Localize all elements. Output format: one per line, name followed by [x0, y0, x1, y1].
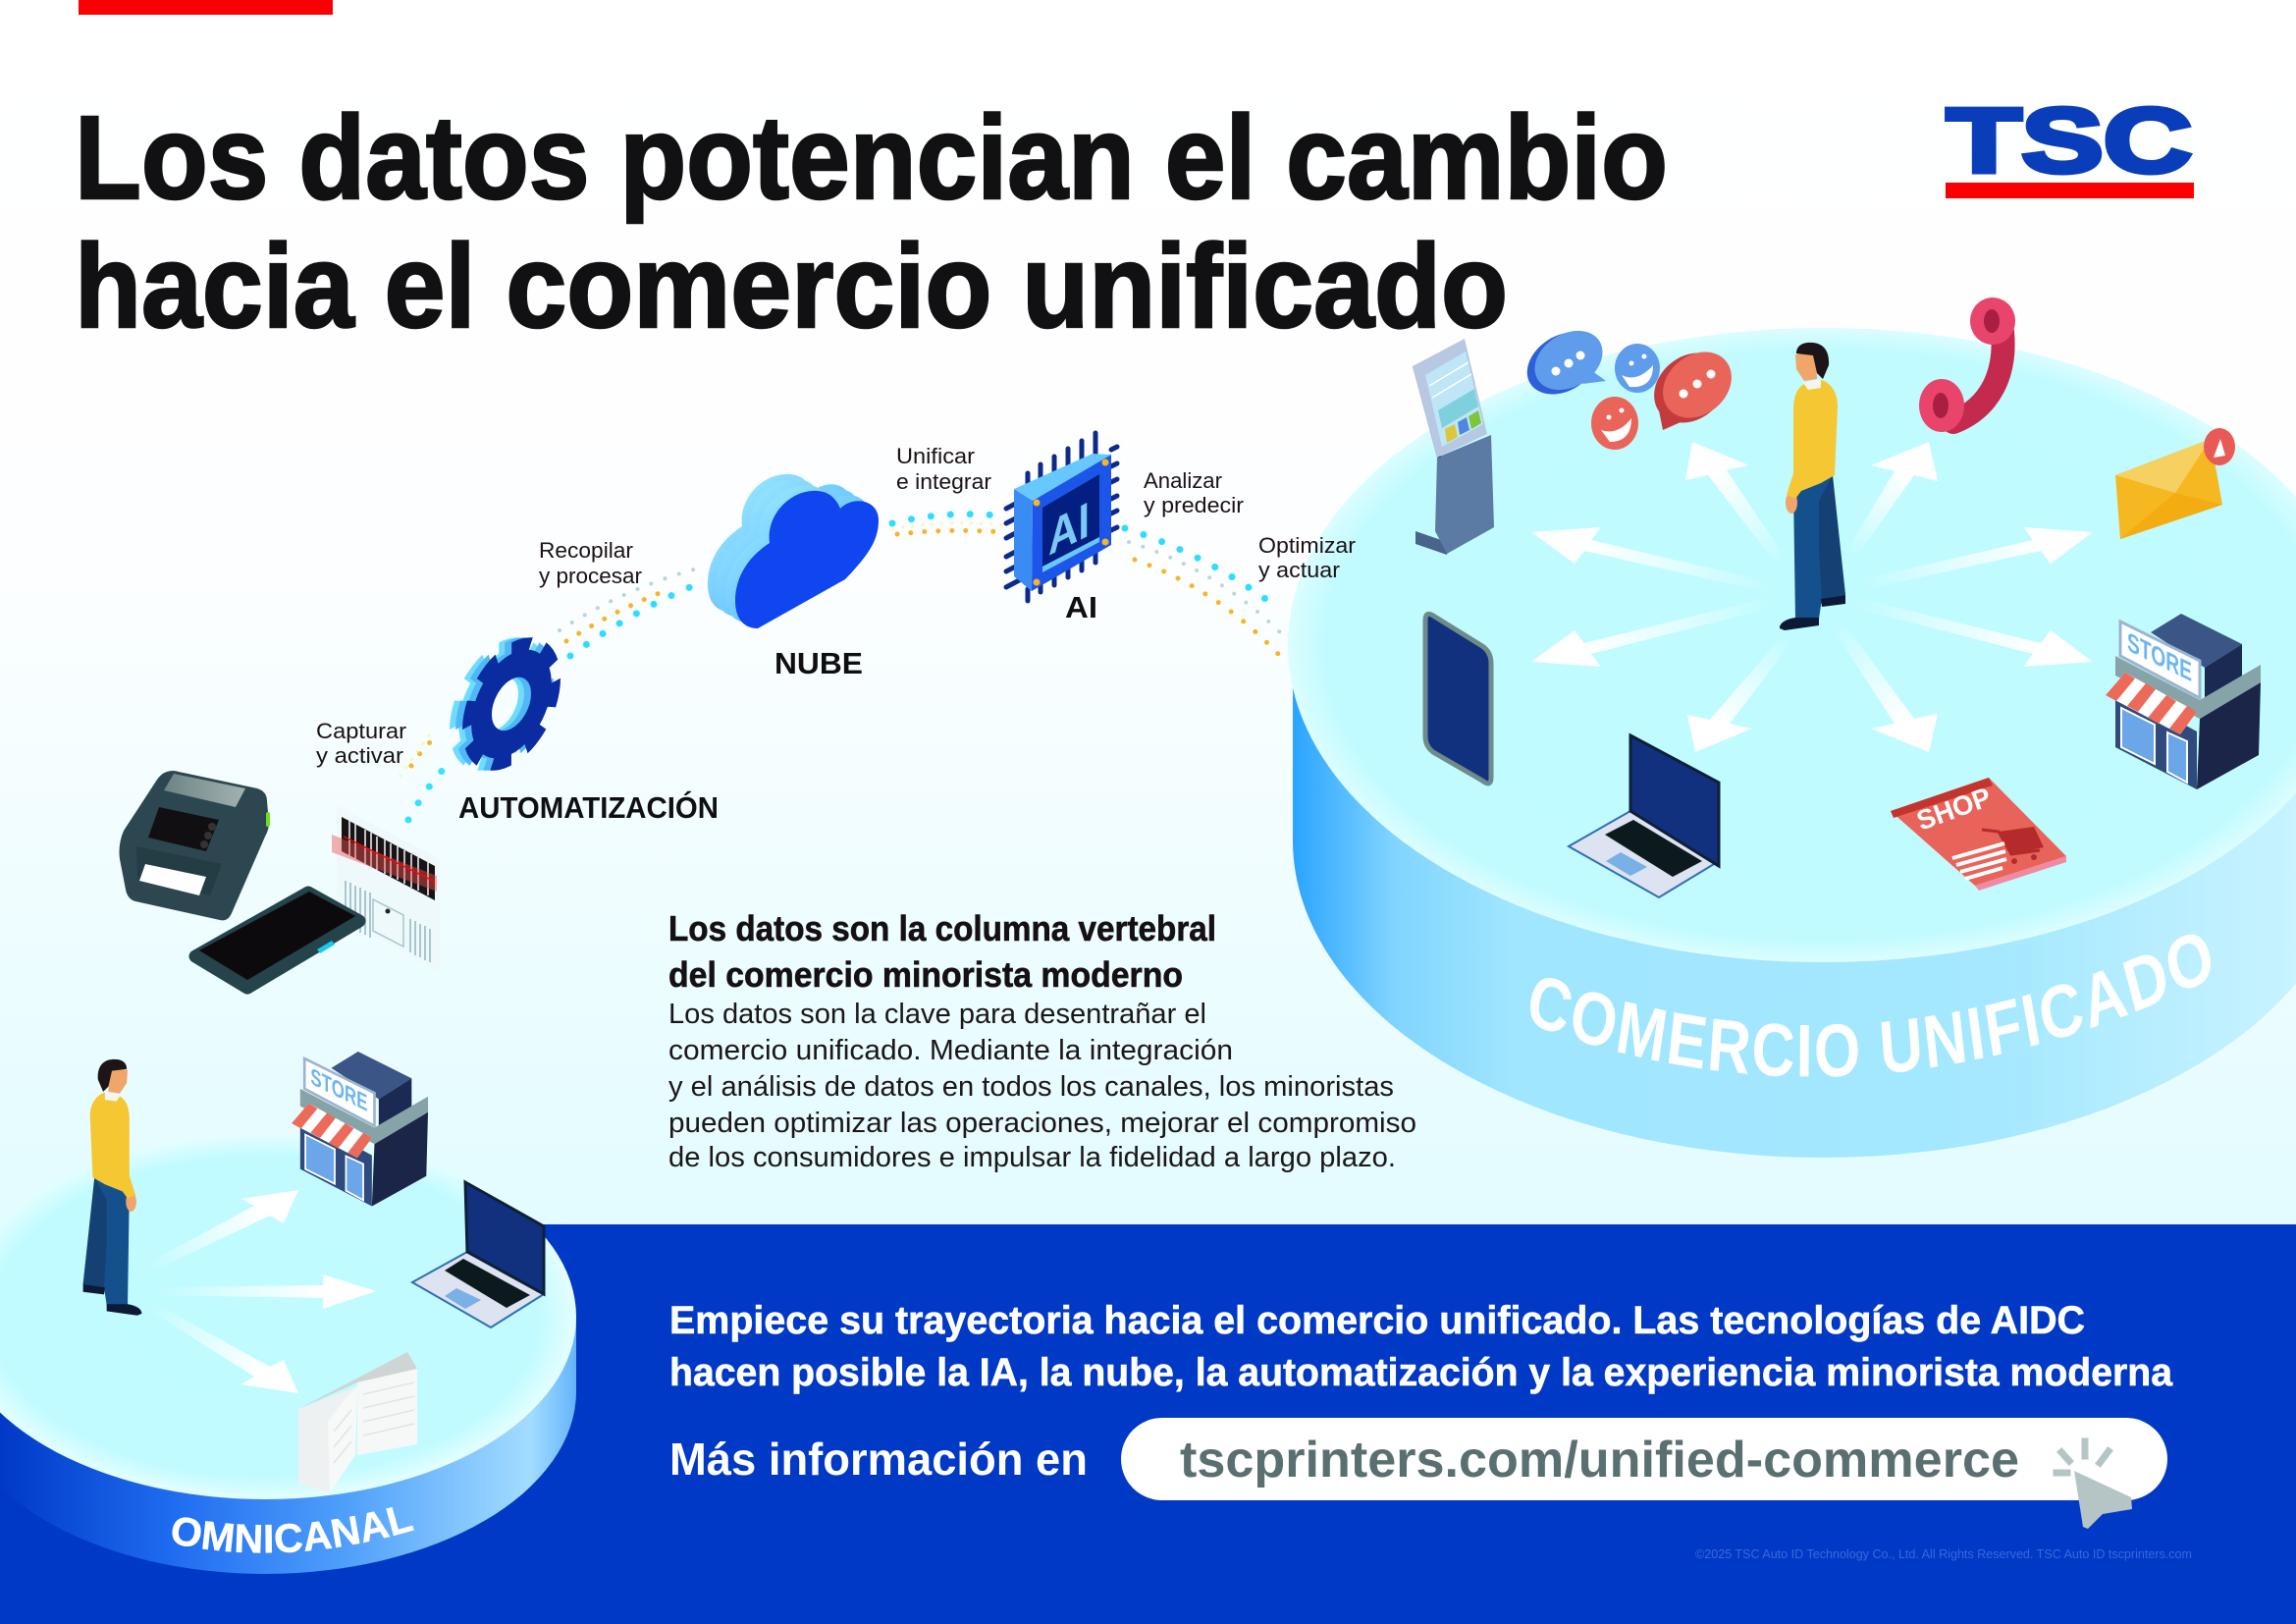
step label: recopilar y procesar: [539, 538, 642, 588]
logo: TSC: TSC: [1947, 89, 2192, 191]
icon: shopper, unified: [1780, 343, 1845, 630]
step label: analizar y predecir: y predecir: [1144, 493, 1244, 517]
step label: unificar e integrar: [896, 444, 991, 494]
icon: smartphone: [1425, 614, 1491, 784]
copyright: ©2025 TSC Auto ID Technology Co., Ltd. All Rights Reserved. TSC Auto ID tscprinters.com: [1695, 1546, 2192, 1561]
icon: laptop: [1569, 735, 1719, 897]
label: nube: NUBE: [774, 646, 863, 680]
step label: optimizar y actuar: y actuar: [1258, 558, 1340, 582]
icon: automation gear: [454, 625, 556, 783]
body copy: Los datos son la clave para desentrañar el: [668, 999, 1206, 1030]
CTA headline: Empiece su trayectoria hacia el comercio unificado. Las tecnologías de AIDC: [669, 1299, 2085, 1342]
body copy: [668, 999, 1416, 1173]
title: [75, 90, 1668, 352]
icon: store, unified: [2106, 614, 2261, 789]
CTA headline: [669, 1299, 2173, 1394]
icon: store, unified: STORE: [2127, 626, 2192, 688]
icon: AI chip: AI: [1048, 492, 1090, 567]
icon: click cursor: [2056, 1441, 2132, 1529]
heading: Los datos son la columna vertebral: [668, 908, 1216, 948]
icon: mobile computer: [195, 892, 359, 988]
heading: [668, 908, 1216, 995]
icon: kiosk: [1413, 339, 1494, 555]
platform: comercio unificado: [1288, 328, 2296, 1158]
call to action: [669, 1299, 2173, 1529]
arrows radiating from shopper: [1531, 442, 2093, 752]
blue footer band: [0, 1224, 2296, 1624]
icon: laptop, omnichannel: [412, 1182, 544, 1327]
background: [0, 0, 2296, 1227]
platform top: [0, 1134, 576, 1499]
red top bar: [79, 0, 333, 15]
step label: unificar e integrar: Unificar: [896, 444, 975, 468]
heading: del comercio minorista moderno: [668, 954, 1183, 995]
URL pill: tscprinters.com/unified-commerce: [1180, 1432, 2019, 1489]
step label: capturar y activar: Capturar: [316, 719, 406, 743]
dots: AI to platform: [1125, 528, 1281, 655]
URL pill: [1121, 1418, 2167, 1500]
logo: TSC: [1946, 89, 2194, 198]
icon: chat bubbles: [1516, 318, 1744, 450]
step label: optimizar y actuar: [1258, 533, 1356, 582]
label: AI: AI: [1065, 590, 1097, 624]
step label: capturar y activar: y activar: [316, 743, 403, 768]
icon: shopper, omnichannel: [83, 1059, 141, 1316]
platform: omnicanal: [0, 1139, 576, 1574]
platform label: COMERCIO UNIFICADO: [1530, 935, 2211, 1077]
platform side: [1293, 645, 2296, 1158]
icon: envelope with notification: [2115, 428, 2235, 539]
data flow: dotted paths: [400, 514, 1281, 820]
arrows from omnichannel shopper: [143, 1190, 376, 1393]
step label: unificar e integrar: e integrar: [896, 469, 991, 494]
icon: telephone handset: [1919, 298, 2015, 432]
CTA headline: hacen posible la IA, la nube, la automatización y la experiencia minorista moderna: [669, 1351, 2173, 1394]
dots: cloud to AI: [892, 514, 1004, 534]
body copy: de los consumidores e impulsar la fidelidad a largo plazo.: [668, 1142, 1396, 1173]
body copy: pueden optimizar las operaciones, mejorar el compromiso: [668, 1108, 1416, 1139]
step label: analizar y predecir: Analizar: [1144, 468, 1222, 493]
step label: recopilar y procesar: Recopilar: [539, 538, 633, 563]
icon: AI chip: [1006, 433, 1117, 601]
icon: cloud: [708, 474, 879, 628]
icon: thermal printer: [120, 771, 270, 920]
body copy: comercio unificado. Mediante la integración: [668, 1035, 1233, 1066]
icon: shop catalogue: SHOP: [1912, 782, 1995, 837]
title: Los datos potencian el cambio: [75, 90, 1668, 224]
icon: store, omnichannel: STORE: [310, 1063, 367, 1117]
step label: recopilar y procesar: y procesar: [539, 564, 642, 588]
platform label: OMNICANAL: [172, 1506, 414, 1553]
text block: data backbone: [668, 908, 1416, 1173]
step label: capturar y activar: [316, 719, 406, 768]
icon: store, omnichannel: [292, 1052, 428, 1207]
label: automatización: AUTOMATIZACIÓN: [458, 789, 719, 825]
step label: analizar y predecir: [1144, 468, 1244, 517]
platform top: [1288, 328, 2296, 962]
more info label: Más información en: [669, 1434, 1088, 1485]
icon: shop catalogue: [1891, 778, 2066, 891]
title: hacia el comercio unificado: [75, 219, 1508, 352]
icon: barcode and RFID label: [332, 805, 440, 972]
icon: open catalogue: [298, 1352, 417, 1492]
platform side: [0, 1317, 576, 1574]
body copy: y el análisis de datos en todos los canales, los minoristas: [668, 1071, 1394, 1103]
step label: optimizar y actuar: Optimizar: [1258, 533, 1356, 558]
dots: automation to cloud: [560, 569, 694, 656]
dots: device to automation: [400, 731, 454, 820]
